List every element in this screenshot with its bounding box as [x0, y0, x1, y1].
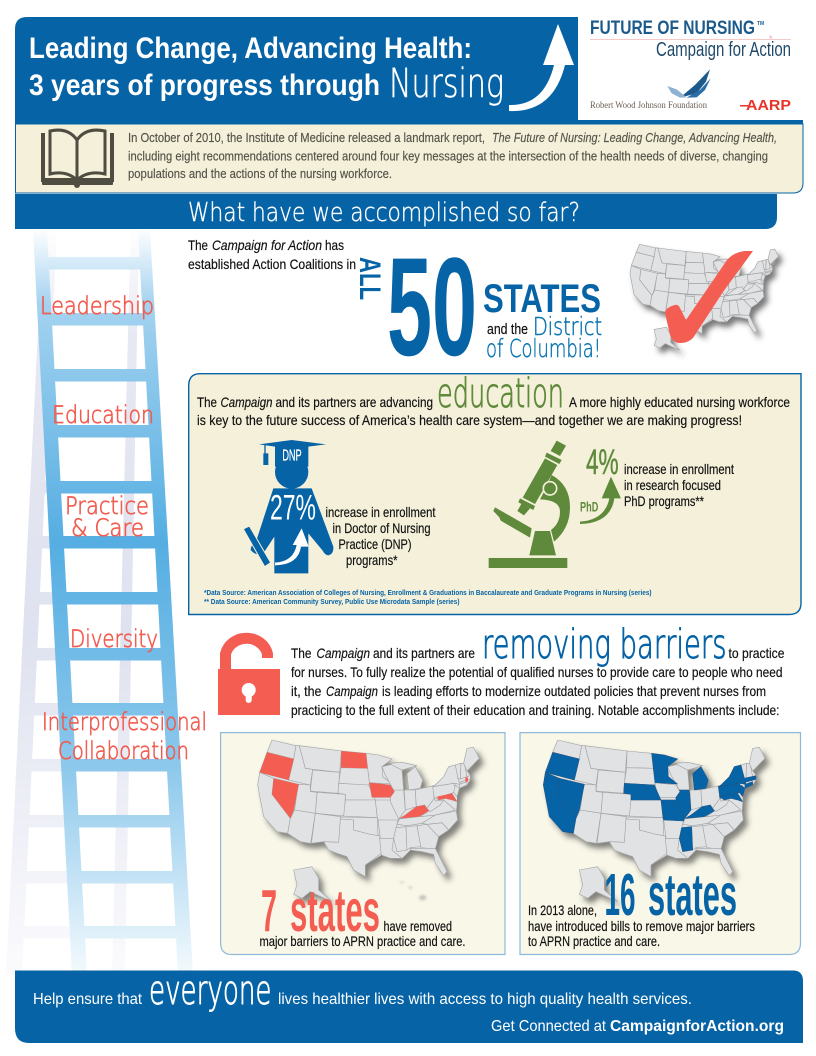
- icon: microscope: 4%: [586, 443, 619, 482]
- header banner: [15, 17, 803, 124]
- big stat: all 50 states: 50: [387, 228, 477, 385]
- footer banner: lives healthier lives with access to high quality health services.: [278, 991, 692, 1008]
- logos panel: Robert Wood Johnson Foundation: [590, 100, 707, 110]
- coalitions statement: The: [188, 237, 208, 253]
- icon: padlock: [218, 638, 280, 715]
- big stat: all 50 states: [353, 228, 602, 385]
- barriers text: Campaign: [316, 645, 370, 661]
- stat text: DNP: increase in enrollment: [326, 504, 436, 520]
- stat: 16 states: [528, 862, 755, 949]
- icon: graduate: [243, 440, 333, 573]
- barriers text: Campaign: [326, 683, 378, 699]
- stat: 16 states: 16: [604, 862, 636, 928]
- icon: microscope: [489, 441, 621, 568]
- data sources: [204, 588, 652, 606]
- stat text: DNP: programs*: [346, 552, 398, 568]
- icon: open book: [42, 130, 113, 188]
- barriers text: and its partners are: [373, 645, 475, 661]
- coalitions statement: Campaign for Action: [212, 237, 322, 253]
- big stat: all 50 states: of Columbia!: [486, 334, 601, 363]
- education intro text: The: [197, 394, 217, 410]
- footer banner: CampaignforAction.org: [610, 1018, 784, 1035]
- stat text: PhD: PhD programs**: [624, 493, 704, 509]
- big stat: all 50 states: ALL: [353, 257, 386, 300]
- big stat: all 50 states: and the: [487, 321, 528, 338]
- stat: 7 states: 7: [261, 878, 277, 944]
- map: 7 states highlighted: [258, 740, 479, 902]
- data sources: ** Data Source: American Community Survey, Public Use Microdata Sample (series): [204, 597, 460, 606]
- icon: graduate: 27%: [270, 488, 316, 527]
- stat text: PhD: in research focused: [624, 477, 721, 493]
- big stat: all 50 states: STATES: [483, 277, 601, 321]
- stat: 16 states: In 2013 alone,: [528, 902, 597, 918]
- education intro text: is key to the future success of America’s health care system—and together we are making progress!: [197, 412, 742, 428]
- map with checkmark: [630, 244, 778, 350]
- footer banner: Help ensure that: [33, 991, 143, 1008]
- panel: 16 states: [520, 733, 800, 954]
- stat text: DNP: in Doctor of Nursing: [332, 520, 430, 536]
- panel: 7 states: [221, 733, 505, 954]
- logos panel: FUTURE OF NURSING: [590, 18, 755, 39]
- barriers text: to practice: [728, 645, 785, 661]
- stat: 16 states: to APRN practice and care.: [528, 933, 660, 949]
- stat: 7 states: major barriers to APRN practice and care.: [260, 933, 466, 949]
- ladder labels: Interprofessional: [42, 708, 207, 736]
- stat: 7 states: states: [290, 878, 380, 944]
- stat text: PhD: increase in enrollment: [624, 461, 734, 477]
- ladder labels: Collaboration: [58, 737, 189, 765]
- logos panel: AARP: [746, 97, 791, 114]
- section band: heading: [15, 194, 777, 229]
- stat text: DNP: Practice (DNP): [338, 536, 412, 552]
- intro text: [128, 131, 777, 181]
- big stat: all 50 states: District: [533, 312, 602, 341]
- ladder labels: Diversity: [70, 625, 158, 653]
- coalitions statement: [188, 237, 356, 272]
- footer banner: Get Connected at: [491, 1018, 607, 1035]
- ladder labels: Education: [52, 401, 154, 429]
- icon: rising arrow: [509, 24, 574, 111]
- stat: 7 states: have removed: [384, 918, 452, 934]
- panel: education: [189, 371, 801, 614]
- intro panel: [16, 124, 803, 193]
- intro text: In October of 2010, the Institute of Medicine released a landmark report,: [128, 131, 485, 145]
- stat text: PhD: [624, 461, 734, 509]
- intro text: populations and the actions of the nursing workforce.: [128, 167, 392, 181]
- barriers text: The: [291, 645, 312, 661]
- logos panel: *: [769, 34, 773, 44]
- footer banner: everyone: [149, 968, 272, 1014]
- barriers text: [291, 622, 785, 718]
- stat: 16 states: have introduced bills to remove major barriers: [528, 918, 755, 934]
- education intro text: and its partners are advancing: [276, 394, 433, 410]
- logos panel: TM: [757, 21, 764, 27]
- education intro text: education: [437, 371, 564, 417]
- coalitions statement: established Action Coalitions in: [188, 256, 356, 272]
- stat: 16 states: states: [648, 862, 737, 928]
- education intro text: Campaign: [220, 394, 273, 410]
- footer banner: [15, 968, 803, 1043]
- barriers text: it, the: [291, 683, 322, 699]
- map: 16 states highlighted: [543, 740, 765, 902]
- logos panel: [590, 18, 791, 114]
- icon: graduate: DNP: [282, 448, 302, 465]
- section band: heading: What have we accomplished so far?: [188, 198, 580, 228]
- title: [29, 32, 504, 107]
- education intro text: [197, 371, 790, 428]
- ladder labels: & Care: [71, 514, 144, 542]
- title: 3 years of progress through: [29, 69, 380, 102]
- ladder labels: [40, 292, 207, 765]
- ladder labels: Practice: [65, 492, 149, 520]
- intro text: The Future of Nursing: Leading Change, Advancing Health,: [492, 131, 777, 145]
- coalitions statement: has: [325, 237, 344, 253]
- ladder illustration: [6, 230, 193, 975]
- icon: microscope: PhD: [580, 499, 598, 515]
- ladder labels: Leadership: [40, 292, 154, 320]
- stat text: DNP: [326, 504, 436, 568]
- title: Leading Change, Advancing Health:: [29, 32, 472, 65]
- title: Nursing: [389, 61, 504, 107]
- data sources: *Data Source: American Association of Colleges of Nursing, Enrollment & Graduations in Baccalaureate and Graduate Programs in Nursing (series): [204, 588, 652, 597]
